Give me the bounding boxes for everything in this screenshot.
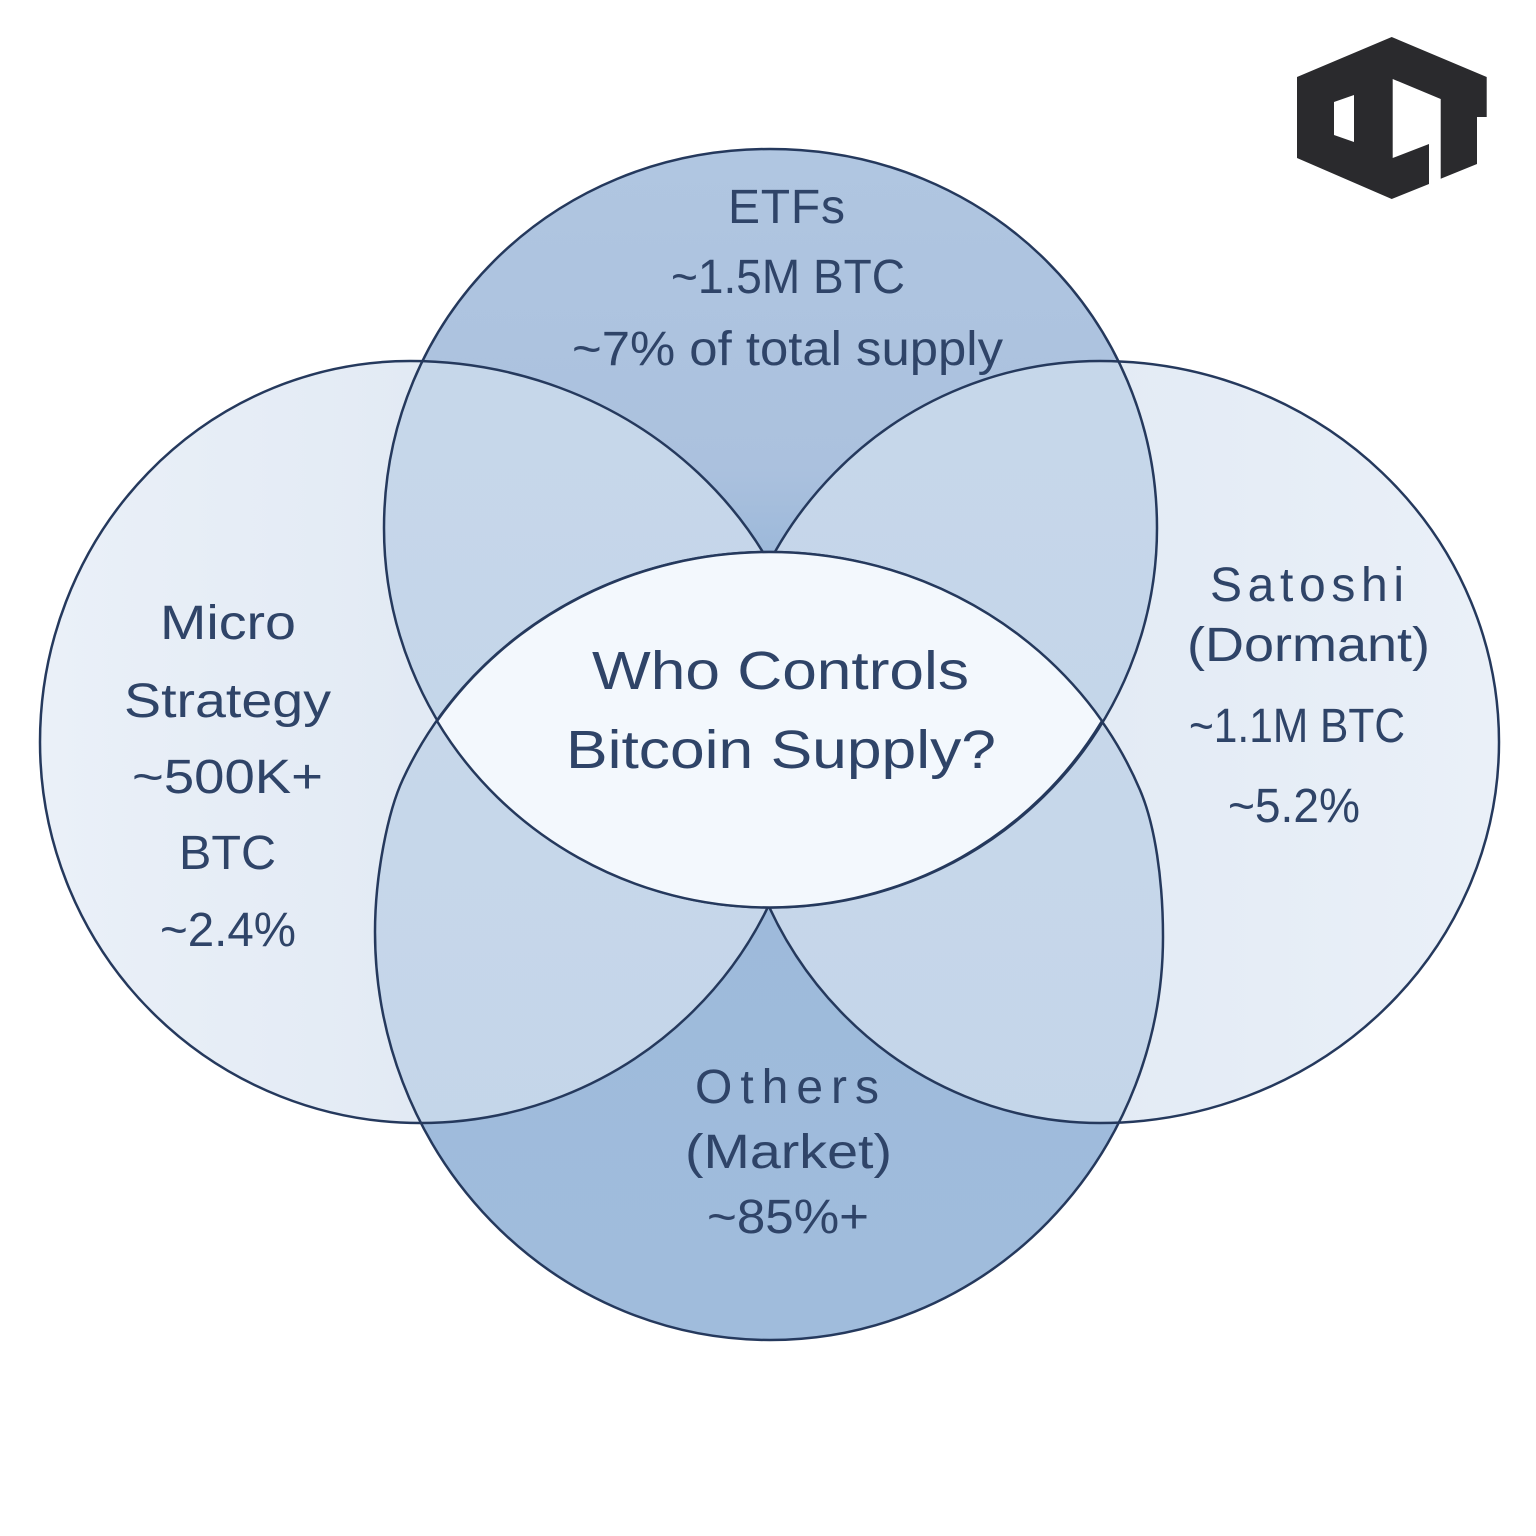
label: center title: Who Controls xyxy=(592,641,969,701)
circle: ETFs xyxy=(384,149,1157,908)
circle: Micro Strategy xyxy=(40,361,817,1123)
center lens outline xyxy=(437,552,1102,908)
label: Others: Others xyxy=(695,1061,879,1114)
outlines xyxy=(40,149,1499,1340)
label: ETFs: ~1.5M BTC xyxy=(671,251,905,304)
label: Others: ~85%+ xyxy=(707,1191,869,1244)
label: Satoshi xyxy=(1187,559,1430,833)
logo xyxy=(1297,37,1487,199)
label: Micro Strategy: ~500K+ xyxy=(132,751,323,804)
label: Micro Strategy: ~2.4% xyxy=(160,904,296,957)
center lens xyxy=(438,553,1100,906)
label: Micro Strategy: Strategy xyxy=(124,675,331,728)
label: center title: Bitcoin Supply? xyxy=(566,720,996,780)
overlap: ETFs and Satoshi xyxy=(777,362,1156,720)
overlap: Others and Satoshi xyxy=(772,724,1162,1122)
label: ETFs: ~7% of total supply xyxy=(572,323,1003,376)
label: ETFs xyxy=(572,181,1003,376)
label: Others: (Market) xyxy=(685,1126,892,1179)
label: Satoshi: (Dormant) xyxy=(1187,619,1430,672)
label: Micro Strategy xyxy=(124,597,331,957)
label: ETFs: ETFs xyxy=(728,181,845,234)
venn diagram xyxy=(40,148,1499,1340)
overlap: Others and Micro Strategy xyxy=(376,723,766,1122)
label: Micro Strategy: Micro xyxy=(160,597,296,650)
label: Satoshi: ~1.1M BTC xyxy=(1189,700,1405,753)
overlap: ETFs and Micro Strategy xyxy=(385,362,760,718)
label: Others xyxy=(685,1061,892,1244)
circle: Others xyxy=(375,552,1163,1340)
label: center title xyxy=(566,641,996,780)
label: Satoshi: Satoshi xyxy=(1210,559,1404,612)
label: Satoshi: ~5.2% xyxy=(1228,780,1360,833)
circle: Satoshi xyxy=(725,361,1499,1123)
label: Micro Strategy: BTC xyxy=(179,827,276,880)
